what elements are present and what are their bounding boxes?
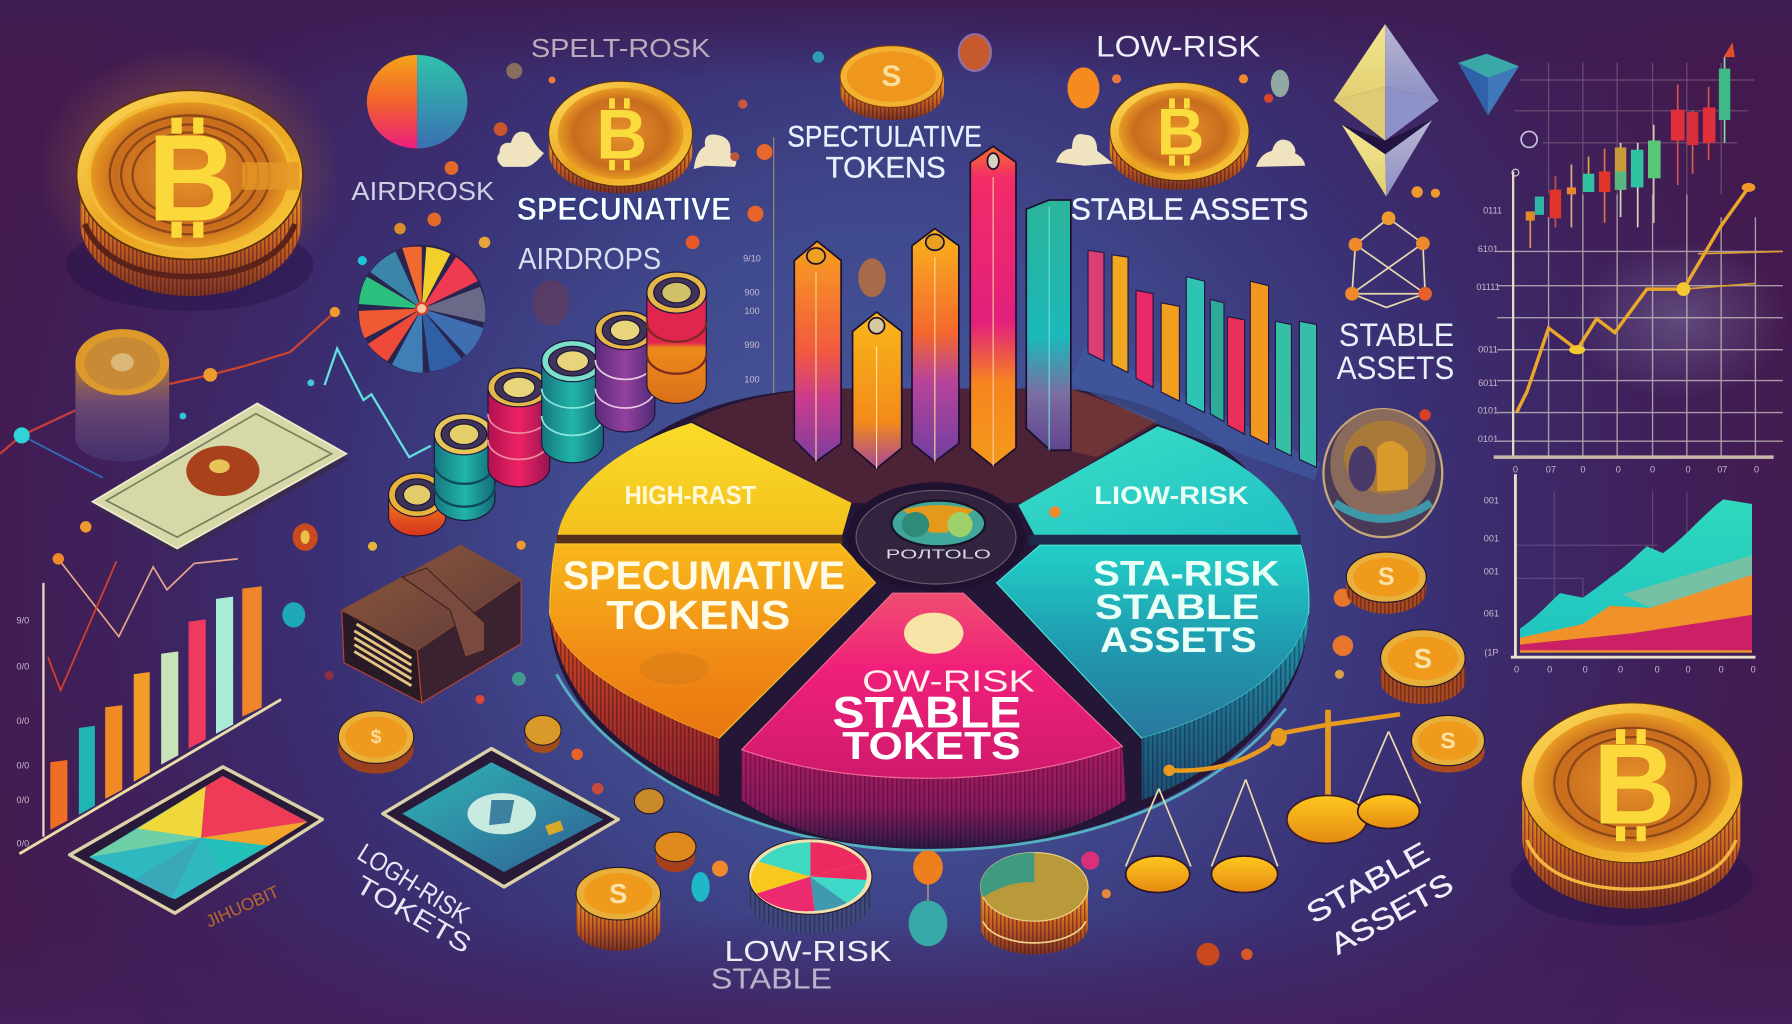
icon: dollar coin top: S — [882, 60, 901, 93]
chart: cyan zigzag line — [325, 349, 431, 457]
chart: blue band under small bars — [1069, 346, 1320, 480]
decorative token dots — [80, 34, 1440, 966]
icon: large bitcoin coin bottom right — [1511, 703, 1753, 926]
wedge label: STA-RISK STABLE ASSETS: ASSETS — [1100, 620, 1257, 660]
wedge label: LOW-RISK: LIOW-RISK — [1094, 482, 1249, 510]
icon: small gold coins — [338, 711, 696, 872]
chart: left bars and zigzag: 0/0 — [17, 761, 29, 771]
label: JIHUOBIT: JIHUOBIT — [203, 881, 282, 931]
pie: center portfolio badge: POЛTOLO — [886, 547, 991, 561]
chart: stacked area: 0 — [1547, 665, 1552, 675]
chart: center axis labels: 100 — [744, 306, 760, 316]
icon: gold coin stack — [576, 867, 661, 951]
icon: faded coin stack — [75, 329, 169, 461]
chart: center axis labels: 9/10 — [743, 253, 761, 263]
chart: stacked area: 0 — [1719, 665, 1724, 675]
chart: candlestick and gold line: 0 — [1650, 465, 1655, 475]
wedge label: OW-RISK STABLE TOKETS: OW-RISK — [862, 664, 1035, 699]
icon: gold coin stack: S — [609, 878, 627, 909]
icon: dollar bill — [93, 403, 349, 554]
icon: dollar coin top — [840, 46, 944, 120]
chart: candlestick and gold line: 0101 — [1478, 405, 1498, 415]
chart: candlestick and gold line: 07 — [1717, 465, 1727, 475]
label: STABLE ASSETS rotated: STABLE — [1301, 836, 1435, 931]
chart: stacked area: 061 — [1484, 609, 1499, 619]
chart: stacked area: 0 — [1583, 665, 1588, 675]
chart: center axis labels: 900 — [744, 288, 760, 298]
chart: left bars and zigzag: 0/0 — [17, 838, 29, 848]
cream circle token — [904, 613, 963, 654]
pie: stable assets wedge — [997, 426, 1309, 800]
chart: candlestick and gold line: 0011 — [1478, 345, 1498, 355]
chart: candlestick and gold line: 0 — [1513, 465, 1518, 475]
wedge label: STA-RISK STABLE ASSETS: STABLE — [1095, 587, 1259, 627]
icon: right gold coins: S — [1378, 563, 1395, 591]
chart: candlestick and gold line: 0 — [1754, 465, 1759, 475]
icon: ethereum diamond — [1334, 24, 1439, 197]
icon: large bitcoin coin top left — [35, 46, 344, 311]
wedge label: STA-RISK STABLE ASSETS — [1093, 554, 1280, 660]
icon: small gold coins: $ — [371, 726, 382, 748]
chart: left bars and zigzag: 9/0 — [17, 616, 29, 626]
icon: right gold coins: S — [1440, 728, 1456, 754]
label: LOW-RISK STABLE bottom: LOW-RISK — [725, 936, 891, 968]
chart: center axis labels: 990 — [744, 340, 760, 350]
icon: bitcoin coin with clouds right — [1056, 82, 1305, 190]
chart: candlestick and gold line: 0111 — [1483, 205, 1502, 215]
chart: stacked area: 0 — [1618, 665, 1623, 675]
chart: candlestick and gold line: 0 — [1616, 465, 1621, 475]
chart: isometric bars — [794, 146, 1071, 469]
chart: candlestick and gold line — [1476, 42, 1789, 475]
label: LOGH-RISK TOKETS: LOGH-RISK — [352, 837, 475, 930]
label: STABLE ASSETS right — [1337, 317, 1454, 386]
icon: metallic coin — [1323, 409, 1442, 537]
icon: bitcoin coin with clouds right: B — [1157, 96, 1205, 170]
icon: large bitcoin coin bottom right: B — [1593, 722, 1676, 849]
chart: stacked area: 0 — [1685, 665, 1691, 675]
wedge label: HIGH-RAST: HIGH-RAST — [625, 480, 756, 510]
label: STABLE ASSETS rotated: ASSETS — [1325, 867, 1459, 961]
chart: left bars and zigzag: 0/0 — [17, 795, 29, 805]
icon: bitcoin coin with clouds: B — [596, 95, 647, 174]
chart: stacked area: 0 — [1514, 665, 1519, 675]
label: SPECTULATIVE TOKENS — [787, 121, 982, 184]
icon: network nodes — [1345, 211, 1432, 307]
icon: large bitcoin coin top left: B — [147, 109, 237, 247]
icon: tablet with pie — [70, 767, 322, 913]
icon: bitcoin coin with clouds — [497, 81, 736, 193]
chart: stacked area: 001 — [1484, 496, 1499, 506]
chart: center axis labels: 100 — [744, 374, 760, 384]
chart: candlestick and gold line: 0 — [1685, 465, 1691, 475]
chart: center axis labels — [743, 137, 774, 429]
chart: faint red trend line — [0, 307, 340, 478]
pie: center portfolio badge — [847, 482, 1025, 592]
icon: right gold coins — [1346, 552, 1485, 773]
icon: balance scale — [1126, 710, 1421, 893]
chart: left bars and zigzag: 0/0 — [17, 661, 29, 671]
label: AIRDROPS: AIRDROPS — [518, 241, 661, 276]
wedge label: OW-RISK STABLE TOKETS: TOKETS — [842, 725, 1021, 768]
chart: small right bars — [1088, 250, 1317, 467]
label: SPECTULATIVE TOKENS: TOKENS — [826, 151, 946, 184]
label: LOW-RISK STABLE bottom — [711, 936, 891, 995]
label: STABLE ASSETS right: ASSETS — [1337, 350, 1454, 386]
chart: stacked area: 001 — [1484, 566, 1499, 576]
icon: right gold coins: S — [1414, 643, 1432, 674]
label: AIRDROSK: AIRDROSK — [351, 176, 495, 206]
chart: candlestick and gold line: 07 — [1546, 465, 1556, 475]
pie: speculative wedge — [550, 423, 875, 797]
label: STABLE ASSETS rotated — [1301, 836, 1459, 961]
wedge label: OW-RISK STABLE TOKETS — [833, 664, 1035, 768]
wedge label: SPECUMATIVE TOKENS: TOKENS — [606, 592, 790, 638]
chart: stacked area: 0 — [1751, 665, 1756, 675]
wedge label: OW-RISK STABLE TOKETS: STABLE — [833, 689, 1021, 738]
chart: stacked area: (1P — [1484, 648, 1499, 658]
icon: tablet with token — [383, 749, 618, 887]
chart: left bars and zigzag: 0/0 — [17, 716, 29, 726]
wedge label: SPECUMATIVE TOKENS — [563, 554, 845, 638]
chart: candlestick and gold line: 0101 — [1478, 434, 1498, 444]
icon: blue gem — [1458, 54, 1519, 115]
wedge label: SPECUMATIVE TOKENS: SPECUMATIVE — [563, 554, 845, 598]
pie: base — [550, 389, 1309, 850]
icon: striped metal coin — [980, 853, 1088, 954]
label: LOW-RISK top: LOW-RISK — [1096, 30, 1261, 63]
label: STABLE ASSETS top: STABLE ASSETS — [1071, 192, 1309, 227]
pie: stable tokens wedge — [742, 593, 1126, 848]
chart: candlestick and gold line: 0 — [1580, 465, 1585, 475]
label: SPECUNATIVE: SPECUNATIVE — [517, 191, 731, 227]
label: SPECTULATIVE TOKENS: SPECTULATIVE — [787, 121, 982, 154]
label: SPELT-ROSK: SPELT-ROSK — [531, 33, 711, 63]
icon: pendant tokens — [909, 850, 947, 946]
chart: stacked area: 001 — [1484, 533, 1499, 543]
chart: candlestick and gold line: 6011 — [1478, 378, 1498, 388]
icon: split ball chart — [367, 55, 467, 149]
icon: color wheel — [358, 245, 486, 373]
wedge label: STA-RISK STABLE ASSETS: STA-RISK — [1093, 554, 1280, 594]
label: LOW-RISK STABLE bottom: STABLE — [711, 963, 832, 995]
icon: pie coin — [749, 839, 872, 934]
chart: candlestick and gold line: 01111 — [1476, 282, 1500, 292]
label: LOGH-RISK TOKETS: TOKETS — [351, 869, 477, 959]
icon: wallet — [342, 545, 521, 703]
chart: candlestick and gold line: 6101 — [1478, 244, 1498, 254]
chart: left bars and zigzag — [17, 553, 281, 854]
chart: stacked area: 0 — [1655, 665, 1660, 675]
label: STABLE ASSETS right: STABLE — [1339, 317, 1454, 353]
chart: stacked area — [1484, 474, 1756, 675]
icon: token stacks staircase — [389, 272, 706, 536]
